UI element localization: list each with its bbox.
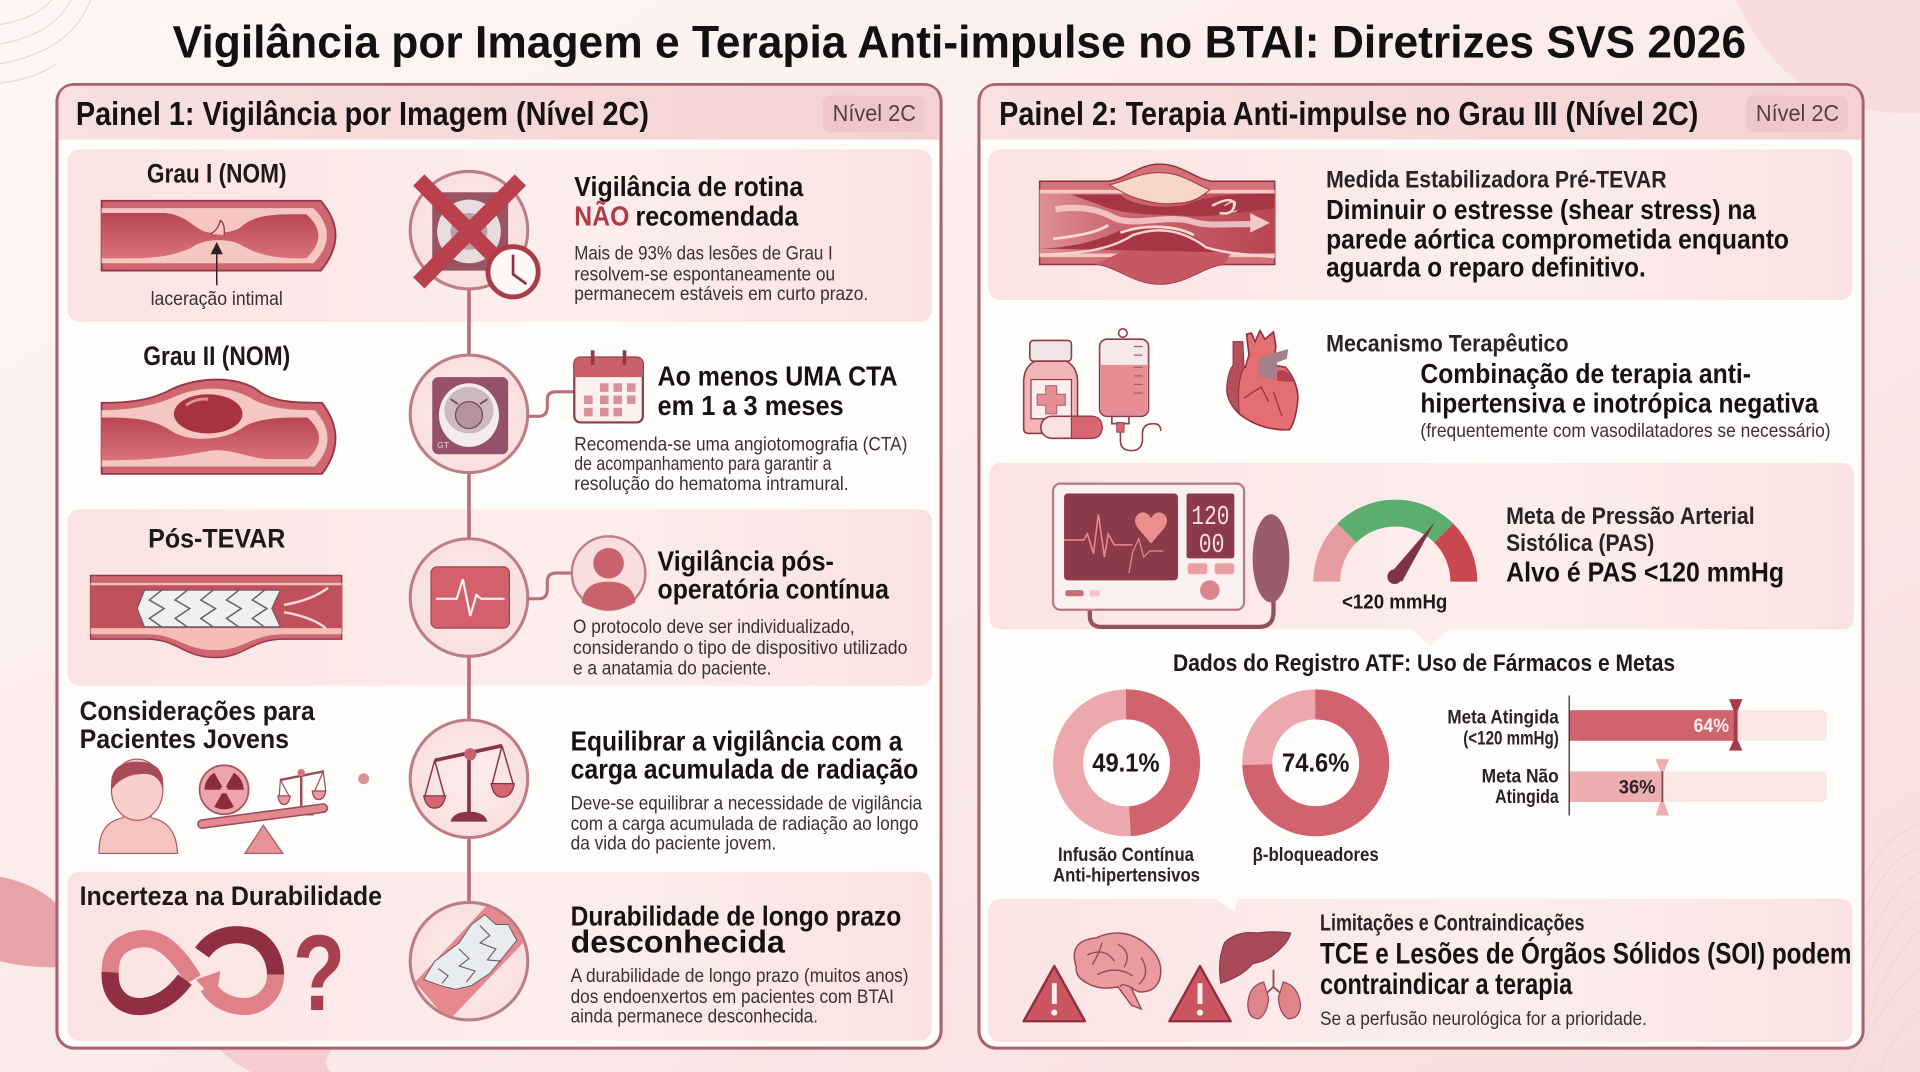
title: Vigilância por Imagem e Terapia Anti-impulse no BTAI: Diretrizes SVS 2026 (173, 17, 1746, 68)
heading: Pós-TEVAR: Pós-TEVAR (148, 523, 285, 553)
timeline connector (467, 282, 470, 906)
bar chart: meta atingida (1447, 695, 1827, 815)
text: Limitações e contraindicações: Se a perfusão neurológica for a prioridade. (1320, 1009, 1647, 1030)
heading: Considerações para Pacientes Jovens: Pacientes Jovens (80, 724, 289, 754)
text: Ao menos uma CTA: de acompanhamento para garantir a (574, 454, 832, 475)
text: Mecanismo terapêutico (1326, 330, 1831, 442)
panel 1 header: Painel 1: Vigilância por Imagem (Nível 2C) (76, 96, 649, 133)
panel 2 header (981, 86, 1861, 140)
bar chart: meta atingida: Meta Atingida (1447, 708, 1559, 729)
connector: CT to calendar (528, 392, 574, 416)
text: Mecanismo terapêutico: Combinação de terapia anti- (1420, 358, 1751, 389)
icon: CT slice: GT (437, 440, 450, 450)
icon: warning triangle 1 (1024, 966, 1085, 1021)
illustration: vessel with intramural hematoma (102, 380, 336, 474)
icon: ECG monitor (410, 539, 528, 656)
donut chart: beta-bloqueadores 74.6%: 74.6% (1282, 747, 1349, 777)
donut labels (1053, 844, 1379, 887)
text: Vigilância de rotina NÃO recomendada: Vigilância de rotina (574, 171, 804, 202)
heading: Grau II: Grau II (NOM) (143, 341, 290, 371)
heading: Dados do registro: Dados do Registro ATF: Uso de Fármacos e Metas (1173, 650, 1675, 677)
panel 2 header: Painel 2: Terapia Anti-impulse no Grau III (Nível 2C) (999, 96, 1698, 133)
text: Vigilância de rotina NÃO recomendada: permanecem estáveis em curto prazo. (574, 284, 868, 305)
icon: broken infinity loop (110, 935, 276, 1007)
label: laceração intimal: laceração intimal (151, 289, 283, 310)
gauge label: <120 mmHg (1342, 592, 1447, 614)
text: Vigilância pós-operatória (573, 546, 907, 680)
text: Ao menos uma CTA: Recomenda-se uma angiotomografia (CTA) (574, 435, 907, 456)
text: Durabilidade desconhecida: dos endoenxertos em pacientes com BTAI (571, 987, 894, 1008)
icon: brain (1074, 933, 1161, 1009)
text: Vigilância pós-operatória: O protocolo deve ser individualizado, (573, 617, 855, 638)
text: Mecanismo terapêutico: (frequentemente com vasodilatadores se necessário) (1420, 421, 1831, 442)
text: Equilibrar vigilância e radiação: da vida do paciente jovem. (571, 834, 776, 855)
text: Vigilância pós-operatória: e a anatamia do paciente. (573, 659, 771, 680)
text: Durabilidade desconhecida: A durabilidade de longo prazo (muitos anos) (571, 966, 909, 987)
text: Vigilância pós-operatória: operatória contínua (658, 574, 889, 605)
row: Medida estabilizadora (1040, 164, 1789, 284)
text: Medida estabilizadora pré-TEVAR: Medida Estabilizadora Pré-TEVAR (1326, 166, 1667, 193)
text: Durabilidade desconhecida (571, 901, 909, 1027)
bar chart: meta atingida: Atingida (1495, 787, 1559, 808)
icon: balance scale (410, 720, 528, 838)
illustration: vessel with intimal tear (102, 201, 336, 271)
arrow: tear pointer (212, 244, 222, 285)
heading: Considerações para Pacientes Jovens (80, 696, 316, 754)
icon: warning triangle 2 (1169, 966, 1231, 1021)
donut chart: infusão contínua 49.1% (1068, 704, 1185, 821)
icon: patient (572, 536, 645, 610)
icon: blood pressure monitor (1053, 484, 1289, 627)
text: Medida estabilizadora pré-TEVAR: aguarda o reparo definitivo. (1326, 252, 1646, 283)
panel 1 header (59, 86, 939, 140)
icon: radiation (200, 765, 249, 814)
text: Vigilância de rotina NÃO recomendada: resolvem-se espontaneamente ou (574, 264, 835, 285)
panel: Painel 2 terapia anti-impulse (979, 84, 1863, 1048)
panel 2 header: Nível 2C (1756, 100, 1839, 126)
icon: calendar (574, 350, 643, 422)
text: Equilibrar vigilância e radiação: carga acumulada de radiação (571, 754, 918, 785)
text: Vigilância de rotina NÃO recomendada: Mais de 93% das lesões de Grau I (574, 244, 833, 265)
text: Vigilância pós-operatória: Vigilância pós- (658, 546, 834, 577)
icon: crossed out CT with clock (410, 171, 538, 297)
donut labels: β-bloqueadores (1253, 844, 1379, 866)
bar chart: meta atingida: Meta Não (1482, 766, 1559, 787)
text: Ao menos uma CTA: em 1 a 3 meses (658, 390, 844, 421)
text: Vigilância de rotina NÃO recomendada: recomendada (636, 200, 799, 231)
text: Mecanismo terapêutico: hipertensiva e inotrópica negativa (1420, 388, 1819, 419)
icon: young patient (99, 759, 178, 853)
text: Durabilidade desconhecida: ainda permanece desconhecida. (571, 1006, 818, 1027)
panel 1 header: Nível 2C (833, 100, 916, 126)
illustration: vessel with stent graft (91, 575, 342, 658)
text: Equilibrar vigilância e radiação: Equilibrar a vigilância com a (571, 726, 903, 757)
donut chart: infusão contínua 49.1%: 49.1% (1092, 747, 1160, 777)
bar chart: meta atingida: (<120 mmHg) (1463, 728, 1559, 749)
text: Medida estabilizadora pré-TEVAR (1326, 166, 1789, 283)
text: Meta de pressão arterial (1506, 503, 1784, 588)
icon: CT slice (410, 355, 528, 473)
text: Equilibrar vigilância e radiação (571, 726, 922, 855)
text: Vigilância pós-operatória: considerando o tipo de dispositivo utilizado (573, 638, 907, 659)
row: Mecanismo terapêutico (1024, 329, 1831, 451)
text: Limitações e contraindicações (1320, 910, 1851, 1030)
text: Meta de pressão arterial: Meta de Pressão Arterial (1506, 503, 1755, 530)
donut chart: beta-bloqueadores 74.6% (1257, 704, 1374, 821)
donut labels: Infusão Contínua (1058, 844, 1195, 866)
icon: lungs (1248, 970, 1300, 1019)
heading: Incerteza na Durabilidade: Incerteza na Durabilidade (80, 881, 382, 911)
text: Limitações e contraindicações: Limitações e Contraindicações (1320, 910, 1584, 936)
icon: IV bag (1100, 329, 1161, 451)
row: Limitações (1024, 910, 1851, 1030)
row: Grau I (102, 158, 868, 310)
row: Durabilidade (80, 881, 909, 1033)
donut labels: Anti-hipertensivos (1053, 865, 1200, 887)
icon: blood pressure monitor: 00 (1199, 531, 1224, 561)
text: Meta de pressão arterial: Alvo é PAS <120 mmHg (1506, 557, 1784, 588)
section: dados do registro ATF (1053, 650, 1827, 887)
icon: liver (1220, 932, 1291, 983)
text: Equilibrar vigilância e radiação: com a carga acumulada de radiação ao longo (571, 814, 918, 835)
text: Medida estabilizadora pré-TEVAR: Diminuir o estresse (shear stress) na (1326, 194, 1756, 225)
text: Durabilidade desconhecida: desconhecida (571, 924, 785, 960)
text: Equilibrar vigilância e radiação: Deve-se equilibrar a necessidade de vigilância (571, 793, 922, 814)
row: Grau II (102, 341, 907, 495)
icon: question mark: ? (293, 912, 345, 1033)
connector: monitor to patient (528, 573, 573, 599)
text: Vigilância de rotina NÃO recomendada: NÃO (574, 200, 629, 231)
row: Meta de pressão (1053, 484, 1784, 627)
icon: seesaw (202, 808, 323, 853)
gauge (1327, 513, 1464, 584)
text: Ao menos uma CTA (574, 361, 907, 495)
illustration: aortic dissection with flow arrow (1040, 164, 1275, 284)
icon: medicine bottle and pill (1024, 340, 1102, 438)
text: Medida estabilizadora pré-TEVAR: parede aórtica comprometida enquanto (1326, 224, 1789, 255)
heading: Considerações para Pacientes Jovens: Considerações para (80, 696, 316, 726)
text: Vigilância de rotina NÃO recomendada (574, 171, 868, 305)
text: Ao menos uma CTA: resolução do hematoma intramural. (574, 474, 849, 495)
icon: blood pressure monitor: 120 (1191, 503, 1229, 533)
icon: heart (1227, 331, 1298, 430)
text: Ao menos uma CTA: Ao menos UMA CTA (658, 361, 898, 392)
text: Mecanismo terapêutico: Mecanismo Terapêutico (1326, 330, 1569, 357)
bar chart: meta atingida: 36% (1619, 776, 1656, 798)
heading: Grau I: Grau I (NOM) (147, 158, 287, 188)
bar chart: meta atingida: 64% (1693, 715, 1729, 737)
text: Durabilidade desconhecida: Durabilidade de longo prazo (571, 901, 901, 932)
text: Limitações e contraindicações: contraindicar a terapia (1320, 968, 1573, 1001)
row: Pós-TEVAR (91, 523, 907, 680)
icon: small scale (278, 769, 326, 814)
row: Pacientes jovens (80, 696, 922, 855)
text: Meta de pressão arterial: Sistólica (PAS) (1506, 530, 1654, 557)
panel: Painel 1 vigilância por imagem (57, 84, 941, 1048)
icon: damaged stent (410, 902, 529, 1021)
